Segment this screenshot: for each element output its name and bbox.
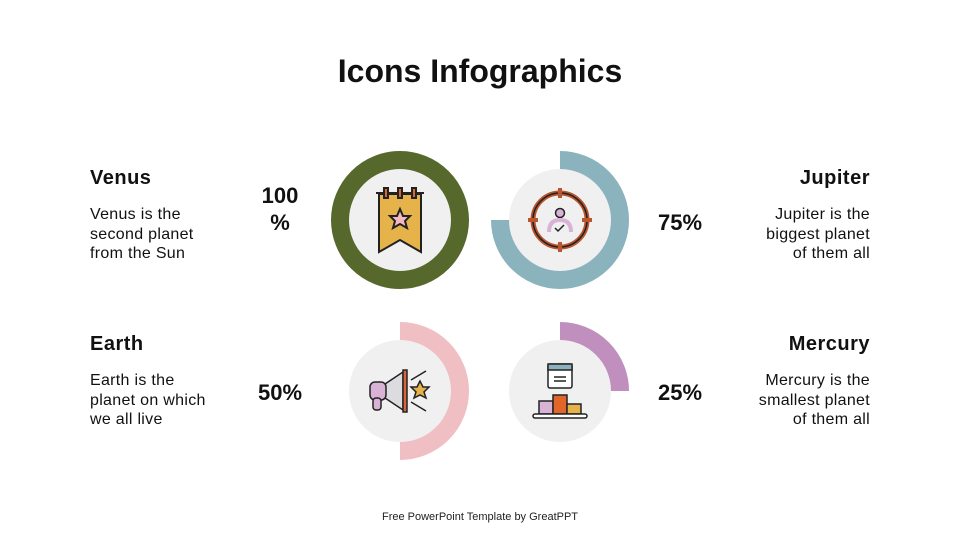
text block: Mercury: smallest planet [759,392,870,409]
text block: Jupiter [766,167,870,262]
percent: Venus: 100 [262,183,298,208]
text block: Mercury: Mercury is the [765,372,870,389]
text block: Venus: Venus [90,167,151,189]
text block: Venus [90,167,194,262]
text block: Earth: Earth is the [90,372,175,389]
text block: Jupiter: of them all [793,245,870,262]
chart: Mercury ring [509,332,620,442]
title: Icons Infographics [338,53,622,89]
icon: target person [528,188,592,252]
footer: Free PowerPoint Template by GreatPPT [382,511,578,523]
text block: Earth: we all live [90,411,163,428]
icon: banner [376,188,424,252]
chart: Venus ring [340,160,460,280]
percent: Jupiter: 75% [658,210,702,235]
text block: Mercury: Mercury [789,333,870,355]
percent: Venus: % [270,210,290,235]
text block: Venus: from the Sun [90,245,185,262]
text block: Earth: Earth [90,333,144,355]
percent: Mercury: 25% [658,380,702,405]
chart: Jupiter ring [500,160,620,280]
icon: megaphone [370,370,429,412]
percent: Venus [262,183,298,235]
text block: Venus: second planet [90,226,194,243]
percent: Earth: 50% [258,380,302,405]
text block: Earth [90,333,206,428]
text block: Jupiter: Jupiter is the [775,206,870,223]
text block: Earth: planet on which [90,392,206,409]
text block: Mercury: of them all [793,411,870,428]
text block: Mercury [759,333,870,428]
text block: Venus: Venus is the [90,206,181,223]
text block: Jupiter: biggest planet [766,226,870,243]
icon: podium [533,364,587,418]
chart: Earth ring [349,332,460,450]
text block: Jupiter: Jupiter [800,167,870,189]
